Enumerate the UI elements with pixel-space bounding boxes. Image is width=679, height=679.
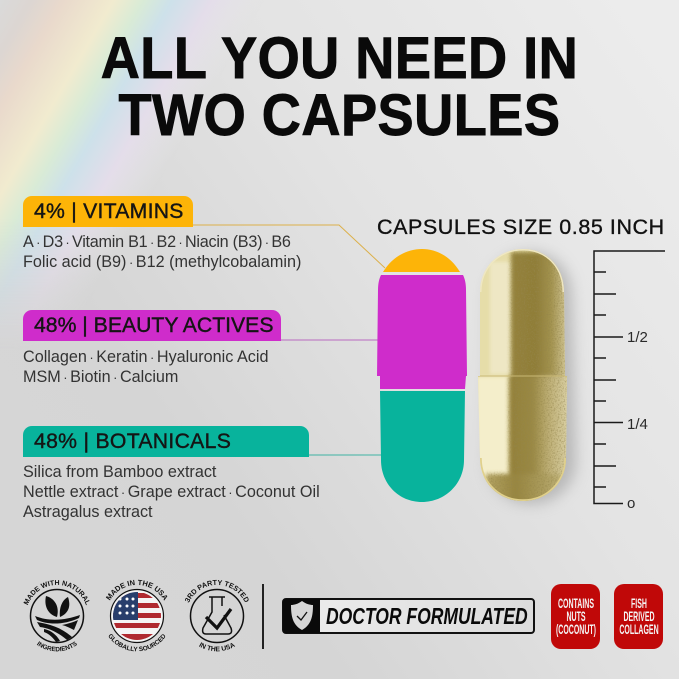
capsule segment: beauty actives — [377, 275, 467, 389]
botanicals heading: 48% | BOTANICALS — [34, 430, 231, 453]
badge: 3rd party tested — [185, 580, 249, 652]
panel: botanicals — [23, 426, 320, 521]
title: TWO CAPSULES — [118, 82, 560, 148]
ruler label: 1/2: 1/2 — [627, 329, 648, 346]
capsule segment: botanicals — [380, 391, 465, 502]
badge: 3rd party tested: 3RD PARTY TESTED — [185, 580, 249, 602]
beauty actives ingredients: MSM·Biotin·Calcium — [23, 368, 178, 386]
leader line: beauty actives — [281, 339, 378, 341]
botanicals ingredients: Nettle extract·Grape extract·Coconut Oil — [23, 483, 320, 501]
vitamins ingredients: A·D3·Vitamin B1·B2·Niacin (B3)·B6 — [23, 233, 291, 251]
botanicals ingredients: Astragalus extract — [23, 503, 153, 521]
botanicals ingredients: Silica from Bamboo extract — [23, 463, 216, 481]
botanicals heading — [23, 426, 309, 457]
badge: doctor formulated — [282, 598, 535, 634]
photo: real capsule — [478, 246, 582, 510]
capsule segment: vitamins — [383, 249, 460, 272]
botanicals ingredients — [23, 463, 320, 521]
leader line: botanicals — [309, 454, 381, 456]
vitamins heading — [23, 196, 193, 227]
capsule size heading: CAPSULES SIZE 0.85 INCH — [377, 215, 665, 239]
doctor formulated text: DOCTOR FORMULATED — [326, 603, 528, 629]
warning: contains nuts: NUTS — [566, 608, 585, 624]
badge: 3rd party tested: IN THE USA — [199, 642, 236, 652]
warning: fish derived collagen — [614, 584, 663, 649]
shield icon — [284, 600, 320, 632]
badge: made with natural ingredients: INGREDIENTS — [36, 641, 77, 652]
beauty actives heading: 48% | BEAUTY ACTIVES — [34, 314, 273, 337]
panel: vitamins — [23, 196, 301, 271]
divider — [262, 584, 264, 649]
panel: beauty actives — [23, 310, 281, 386]
leader line: vitamins — [193, 225, 385, 268]
vitamins ingredients — [23, 233, 301, 271]
vitamins ingredients: Folic acid (B9)·B12 (methylcobalamin) — [23, 253, 301, 271]
warning: fish derived collagen: FISH — [631, 595, 646, 611]
warning: contains nuts: (COCONUT) — [555, 621, 596, 637]
badge: made in the usa: MADE IN THE USA — [106, 580, 168, 601]
ruler label: 0: o — [627, 495, 635, 512]
badge: made in the usa: GLOBALLY SOURCED — [108, 634, 166, 652]
warning: fish derived collagen: COLLAGEN — [619, 621, 658, 637]
beauty actives ingredients — [23, 348, 268, 386]
badge: made with natural ingredients: MADE WITH NATURAL — [24, 580, 90, 606]
beauty actives heading — [23, 310, 281, 341]
badge: made in the usa — [106, 580, 168, 652]
title: ALL YOU NEED IN — [101, 26, 578, 90]
ruler label: 1/4: 1/4 — [627, 416, 648, 433]
vitamins heading: 4% | VITAMINS — [34, 200, 184, 223]
badge: made with natural ingredients — [24, 580, 90, 652]
warning: fish derived collagen: DERIVED — [623, 608, 654, 624]
warning: contains nuts: CONTAINS — [557, 595, 594, 611]
warning: contains nuts — [551, 584, 600, 649]
beauty actives ingredients: Collagen·Keratin·Hyaluronic Acid — [23, 348, 268, 366]
title — [101, 26, 578, 148]
